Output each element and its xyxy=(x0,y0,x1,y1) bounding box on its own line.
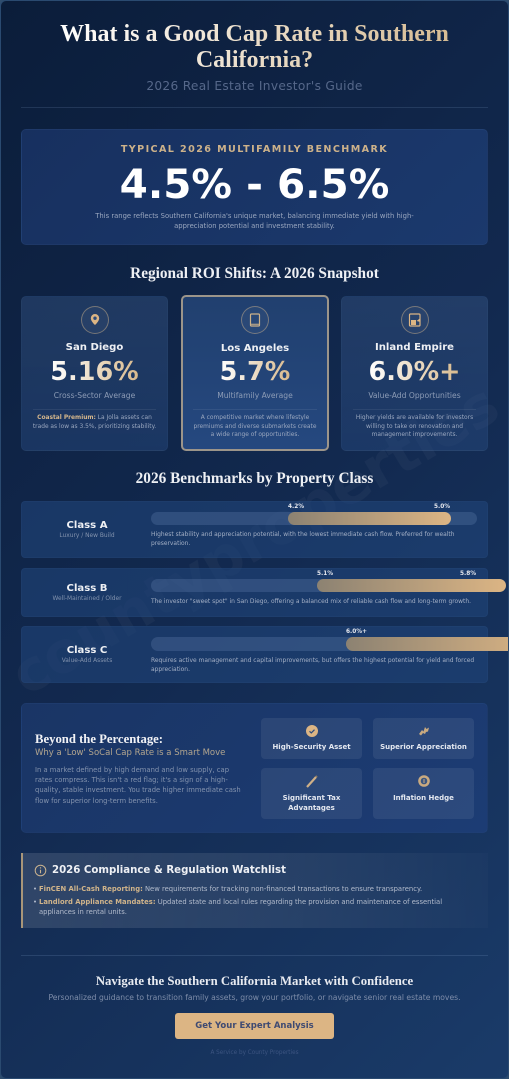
compliance heading: 2026 Compliance & Regulation Watchlist xyxy=(52,865,286,876)
hero range: 4.5% - 6.5% xyxy=(120,160,389,208)
description: Requires active management and capital improvements, but offers the highest potential for yield and forced appreciation. xyxy=(151,657,474,673)
button: expert analysis xyxy=(175,1013,334,1039)
rate: 5.16% xyxy=(50,357,139,387)
tile: significant tax advantages: Advantages xyxy=(288,804,335,812)
icon: pencil xyxy=(306,775,318,788)
class subtitle: Value-Add Assets xyxy=(62,658,112,664)
icon: info circle xyxy=(34,864,46,876)
divider xyxy=(21,955,488,956)
icon: tablet xyxy=(241,306,269,334)
row: Class B xyxy=(21,568,488,617)
card: San Diego xyxy=(21,296,168,451)
rate: 6.0%+ xyxy=(368,357,461,387)
range labels: 5.1% xyxy=(317,571,333,577)
description: Coastal Premium: La Jolla assets can trade as low as 3.5%, prioritizing stability. xyxy=(33,415,156,430)
panel subheading: Why a 'Low' SoCal Cap Rate is a Smart Move xyxy=(35,748,225,758)
row: Class B: 5.8% xyxy=(460,571,476,577)
footer text: Personalized guidance to transition family assets, grow your portfolio, or navigate senior real estate moves. xyxy=(48,993,461,1002)
tile: significant tax advantages xyxy=(261,768,362,819)
panel body: In a market defined by high demand and low supply, cap rates compress. This isn't a red flag; it's a sign of a high-quality, stable investment. You trade higher immediate cash flow for superior long-term benefits. xyxy=(35,766,241,805)
icon: check badge xyxy=(306,725,318,737)
icon: chart sprig xyxy=(419,727,429,736)
tile: superior appreciation xyxy=(373,718,474,759)
hero label: TYPICAL 2026 MULTIFAMILY BENCHMARK xyxy=(121,144,388,155)
description: Higher yields are available for investors willing to take on renovation and management improvements. xyxy=(356,415,473,438)
panel: compliance watchlist: • xyxy=(33,898,37,906)
subtitle: 2026 Real Estate Investor's Guide xyxy=(146,79,363,93)
title xyxy=(21,21,488,73)
header divider xyxy=(21,107,488,108)
city name: Inland Empire xyxy=(375,342,454,353)
compliance item: appliance mandates: Landlord Appliance Mandates: Updated state and local rules regarding the provision and maintenance of essential appliances in rental units. xyxy=(39,898,442,916)
range bar xyxy=(151,512,477,525)
hero description: This range reflects Southern California's unique market, balancing immediate yield with high-appreciation potential and investment stability. xyxy=(95,212,414,230)
rate: 5.7% xyxy=(220,357,290,387)
description: A competitive market where lifestyle premiums and diverse submarkets create a wide range of opportunities. xyxy=(194,415,316,438)
card: Inland Empire xyxy=(341,296,488,451)
tile: significant tax advantages: Significant Tax xyxy=(283,794,340,802)
footer heading: Navigate the Southern California Market with Confidence xyxy=(96,974,413,988)
range label: 6.0%+ xyxy=(346,629,367,635)
class label: Class B xyxy=(67,583,107,594)
panel heading: Beyond the Percentage: xyxy=(35,732,163,746)
panel: beyond the percentage xyxy=(21,703,488,833)
icon: coin xyxy=(418,775,430,787)
tile: high-security asset: High-Security Asset xyxy=(272,743,351,751)
range bar xyxy=(151,637,508,651)
rate caption: Multifamily Average xyxy=(217,391,293,400)
rate caption: Cross-Sector Average xyxy=(54,391,135,400)
description: Highest stability and appreciation potential, with the lowest immediate cash flow. Preferred for wealth preservation. xyxy=(151,531,455,547)
title: California? xyxy=(196,47,313,73)
compliance item: FinCEN: FinCEN All-Cash Reporting: New requirements for tracking non-financed transactions to ensure transparency. xyxy=(39,885,422,893)
tile: high-security asset xyxy=(261,718,362,759)
rate caption: Value-Add Opportunities xyxy=(368,391,461,400)
title: What is a Good Cap Rate in Southern xyxy=(60,21,449,47)
range bar xyxy=(151,579,506,592)
service credit: A Service by County Properties xyxy=(210,1050,299,1056)
icon: building chart xyxy=(400,306,428,334)
heading: property class: 2026 Benchmarks by Property Class xyxy=(136,470,373,487)
panel: compliance watchlist xyxy=(21,853,488,928)
class label: Class A xyxy=(66,520,108,531)
tile: superior appreciation: Superior Appreciation xyxy=(380,743,467,751)
watermark: countyproperties xyxy=(0,371,509,709)
row: Class C xyxy=(21,626,488,683)
card: Los Angeles (featured) xyxy=(181,295,329,451)
button: expert analysis: Get Your Expert Analysis xyxy=(195,1021,314,1031)
class subtitle: Luxury / New Build xyxy=(59,533,115,539)
tile: inflation hedge xyxy=(373,768,474,819)
description: The investor "sweet spot" in San Diego, offering a balanced mix of reliable cash flow and long-term growth. xyxy=(151,598,471,605)
class label: Class C xyxy=(67,645,107,656)
city name: Los Angeles xyxy=(221,343,289,354)
panel: compliance watchlist: • xyxy=(33,885,37,893)
tile: inflation hedge: Inflation Hedge xyxy=(393,794,454,802)
row: Class A: 5.0% xyxy=(434,504,450,510)
heading: regional: Regional ROI Shifts: A 2026 Snapshot xyxy=(130,265,379,282)
range labels: 4.2% xyxy=(288,504,304,510)
city name: San Diego xyxy=(66,342,123,353)
class subtitle: Well-Maintained / Older xyxy=(52,596,122,602)
icon: map pin xyxy=(80,306,108,334)
row: Class A xyxy=(21,501,488,558)
hero panel: multifamily benchmark xyxy=(21,129,488,245)
